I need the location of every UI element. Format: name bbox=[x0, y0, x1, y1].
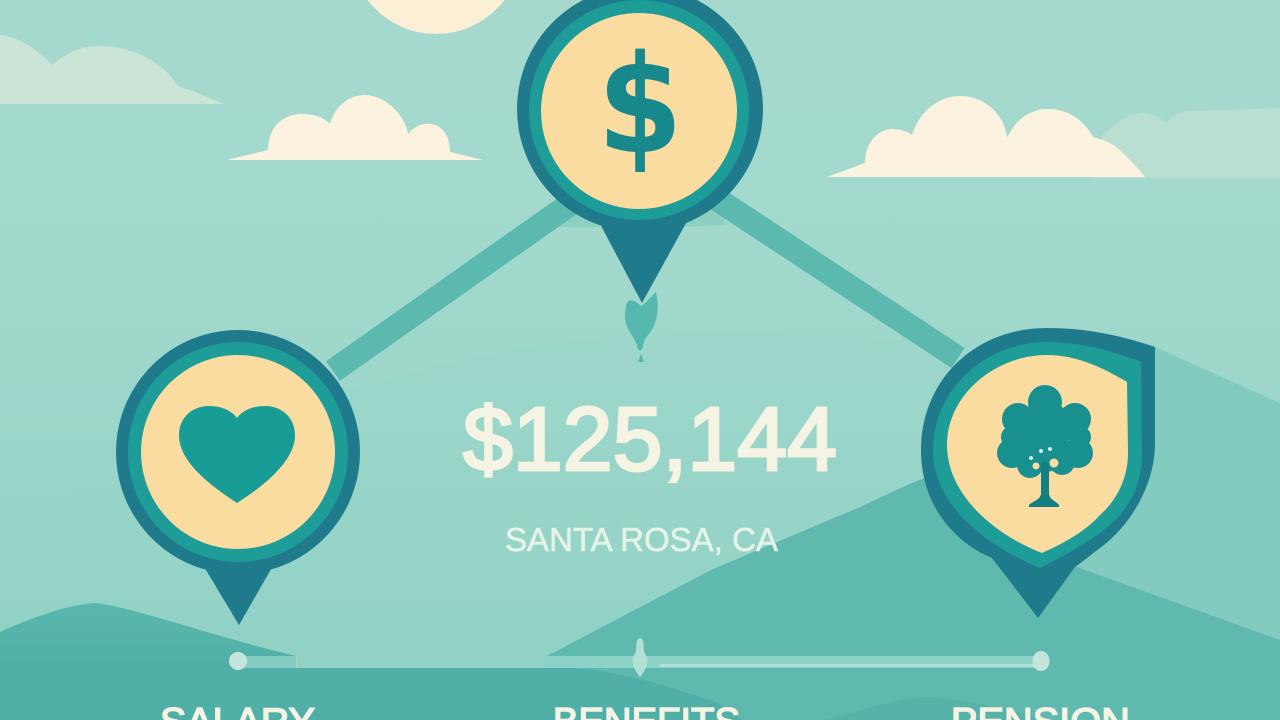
slider dot: salary bbox=[229, 652, 247, 670]
pin: salary (top) bbox=[517, 0, 763, 303]
connector line: left bbox=[333, 190, 590, 371]
pin: pension (right shield) bbox=[921, 328, 1155, 618]
cloud: centre left bbox=[227, 95, 483, 160]
ink drip under top pin bbox=[625, 292, 658, 362]
sun bbox=[350, 0, 522, 34]
left hill bbox=[0, 603, 296, 720]
icon: heart bbox=[179, 406, 295, 503]
large hill right bbox=[545, 478, 1280, 720]
location label: SANTA ROSA, CA bbox=[505, 521, 778, 558]
foreground hill bottom right bbox=[825, 697, 1045, 720]
icon: tree bbox=[997, 385, 1093, 507]
cloud: faded right bbox=[1090, 108, 1280, 178]
slider dot: pension bbox=[1032, 651, 1050, 671]
cloud: top left bbox=[0, 35, 224, 104]
slider track bbox=[229, 638, 1050, 677]
connector band behind top pin bbox=[555, 200, 725, 227]
cloud: right bbox=[827, 96, 1145, 177]
slider dot: benefits bbox=[633, 638, 647, 677]
distant hills bbox=[0, 334, 1280, 720]
pin: benefits (left) bbox=[116, 330, 360, 625]
headline figure: $125,144 bbox=[463, 390, 837, 490]
connector line: right bbox=[700, 188, 958, 358]
foreground band bbox=[296, 668, 742, 720]
icon: dollar sign: $ bbox=[597, 26, 683, 185]
